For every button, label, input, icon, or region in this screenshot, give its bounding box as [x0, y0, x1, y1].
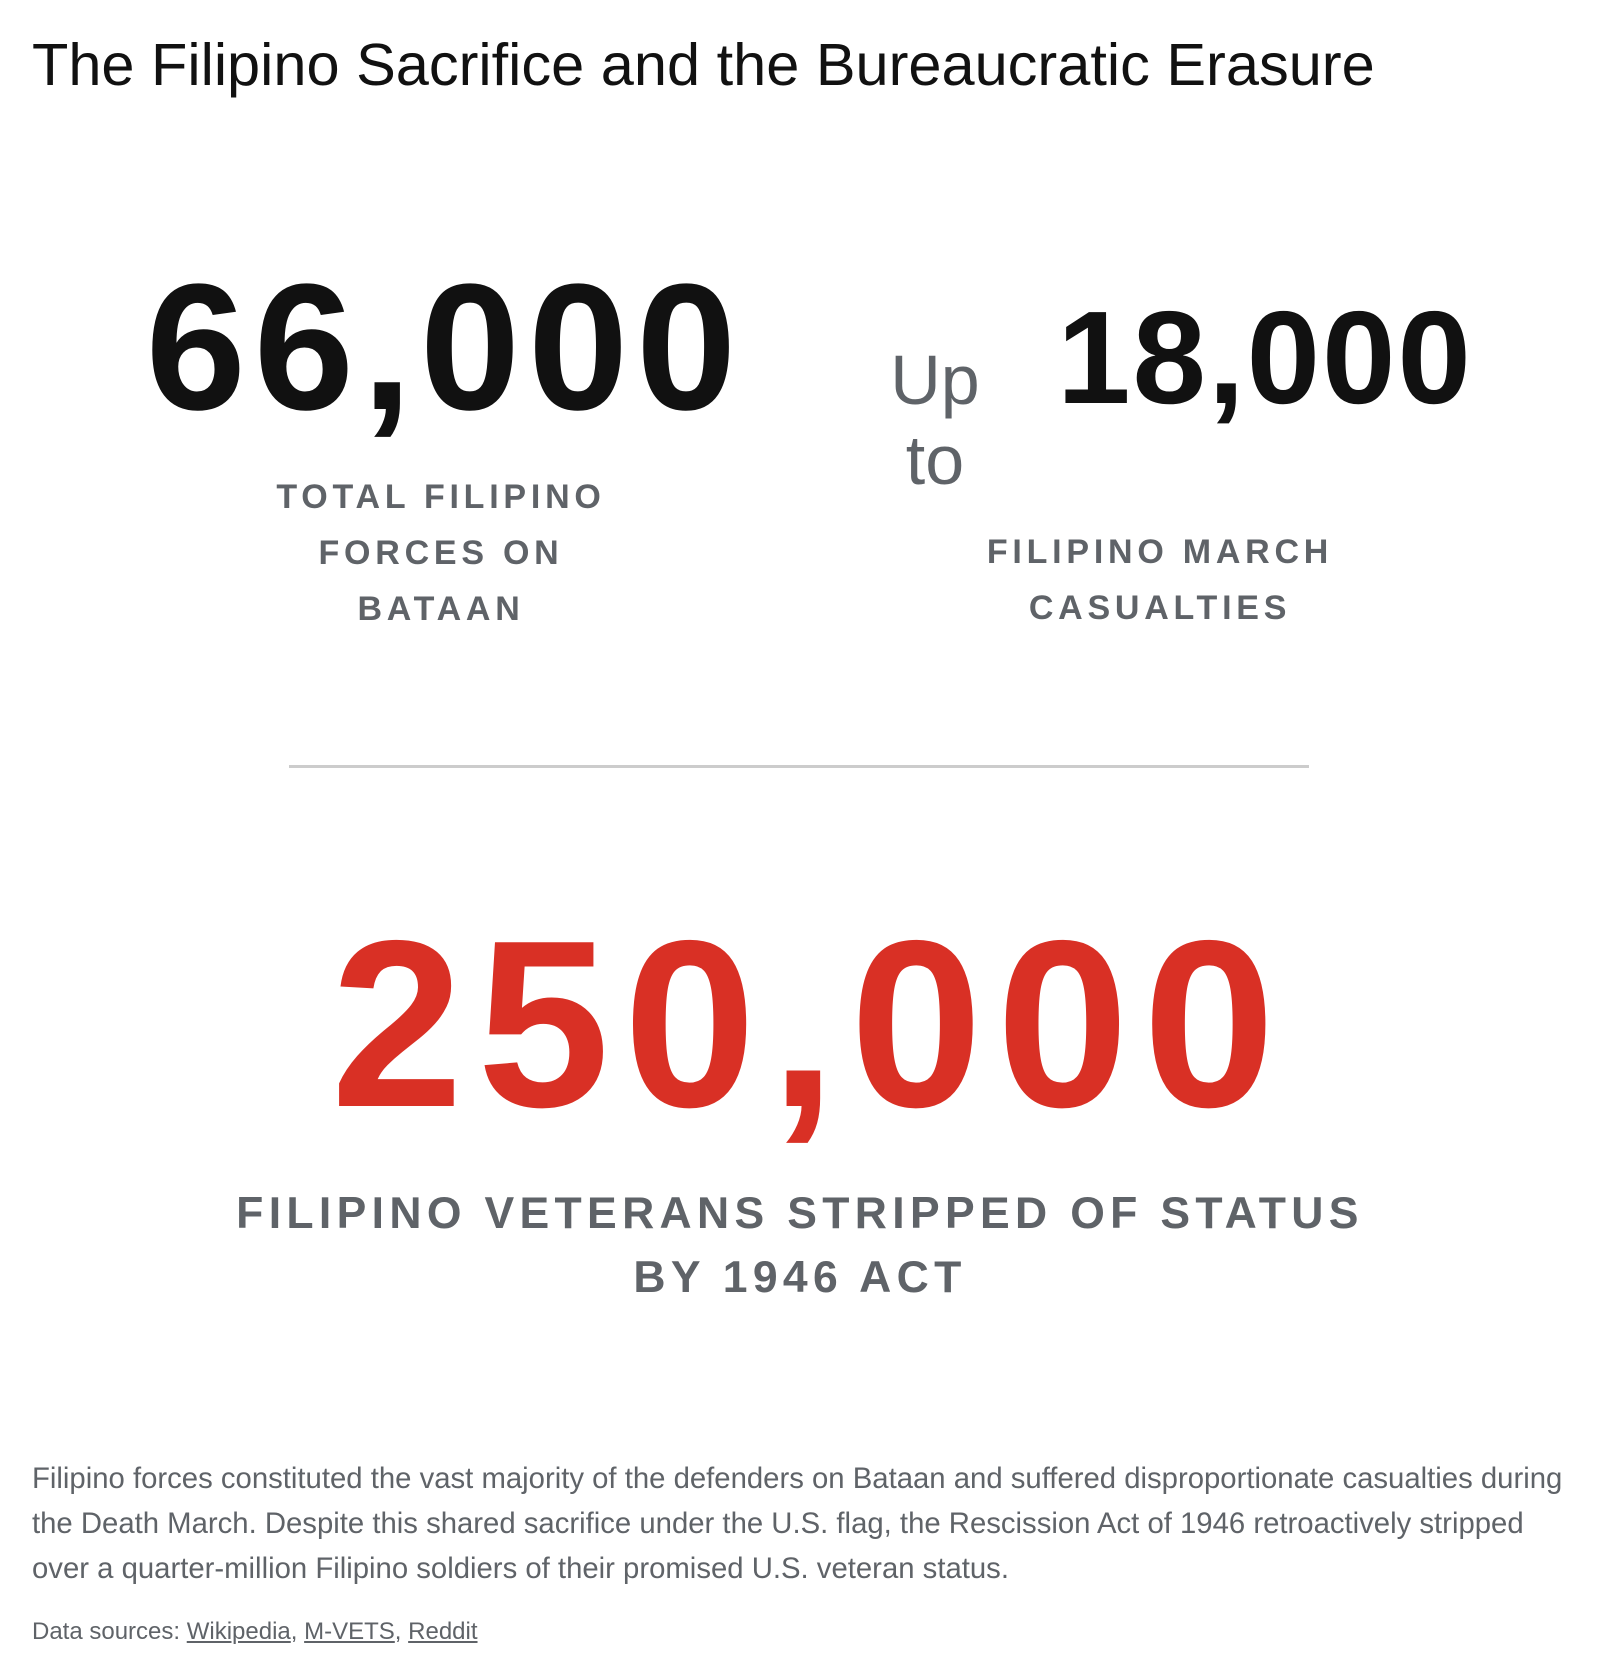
paragraph — [32, 1462, 1562, 1585]
stat: 250,000: 250,000 — [331, 892, 1289, 1157]
label: total filipino forces — [276, 478, 606, 628]
label: total filipino forces: TOTAL FILIPINO — [276, 478, 606, 516]
paragraph: Filipino forces constituted the vast majority of the defenders on Bataan and suffered disproportionate casualties during — [32, 1462, 1562, 1495]
label: filipino march casualties: CASUALTIES — [1029, 589, 1291, 627]
stat: 18,000: 18,000 — [1057, 284, 1473, 431]
label: filipino march casualties: FILIPINO MARCH — [987, 533, 1333, 571]
label: veterans stripped — [236, 1189, 1364, 1302]
paragraph: over a quarter-million Filipino soldiers of their promised U.S. veteran status. — [32, 1552, 1009, 1585]
title: The Filipino Sacrifice and the Bureaucratic Erasure — [32, 31, 1375, 98]
paragraph: the Death March. Despite this shared sacrifice under the U.S. flag, the Rescission Act of 1946 retroactively stripped — [32, 1507, 1524, 1540]
number 66,000: 66,000 — [146, 247, 744, 448]
prefix: up to: Up — [890, 341, 980, 419]
label: filipino march casualties — [987, 533, 1333, 627]
label: veterans stripped: FILIPINO VETERANS STRIPPED OF STATUS — [236, 1189, 1364, 1238]
label: total filipino forces: FORCES ON — [319, 534, 563, 572]
data sources: Data sources: Wikipedia, M-VETS, Reddit — [32, 1618, 478, 1645]
prefix: up to — [890, 341, 980, 499]
label: veterans stripped: BY 1946 ACT — [633, 1253, 967, 1302]
prefix: up to: to — [906, 421, 964, 499]
label: total filipino forces: BATAAN — [357, 590, 525, 628]
